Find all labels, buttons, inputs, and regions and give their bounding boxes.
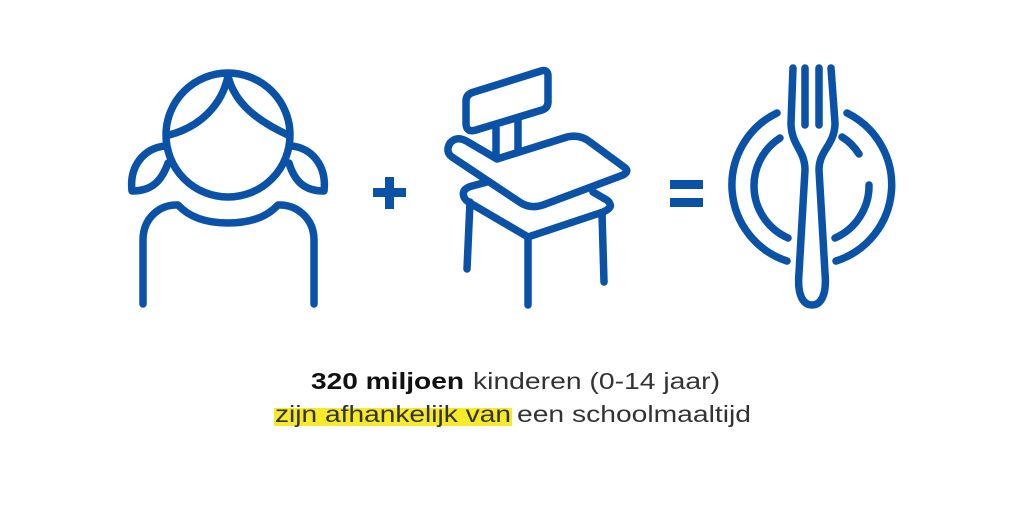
caption line 2: zijn afhankelijk van bbox=[275, 401, 511, 427]
girl head bbox=[166, 73, 290, 197]
icon: school chair with desk bbox=[448, 71, 627, 305]
girl hair fringe bbox=[169, 76, 288, 135]
icon: plate and fork bbox=[732, 68, 892, 305]
plate outer rim bbox=[732, 113, 892, 261]
icon: equals sign bbox=[670, 180, 703, 207]
caption line 1: 320 miljoen bbox=[311, 368, 464, 394]
girl body bbox=[143, 205, 314, 304]
icon: girl bbox=[132, 73, 324, 304]
chair backrest bbox=[466, 71, 548, 131]
plate inner rim bbox=[754, 137, 869, 238]
caption line 2: een schoolmaaltijd bbox=[517, 401, 751, 427]
chair legs bbox=[467, 202, 604, 305]
chair back supports bbox=[496, 119, 518, 158]
highlight behind text bbox=[274, 408, 512, 426]
caption line 1: kinderen (0-14 jaar) bbox=[473, 368, 720, 394]
girl left pigtail bbox=[132, 146, 168, 191]
chair seat bbox=[463, 182, 610, 237]
icon: plus sign bbox=[373, 177, 406, 209]
writing desk bbox=[448, 136, 627, 207]
girl right pigtail bbox=[289, 146, 324, 191]
fork bbox=[791, 68, 835, 305]
